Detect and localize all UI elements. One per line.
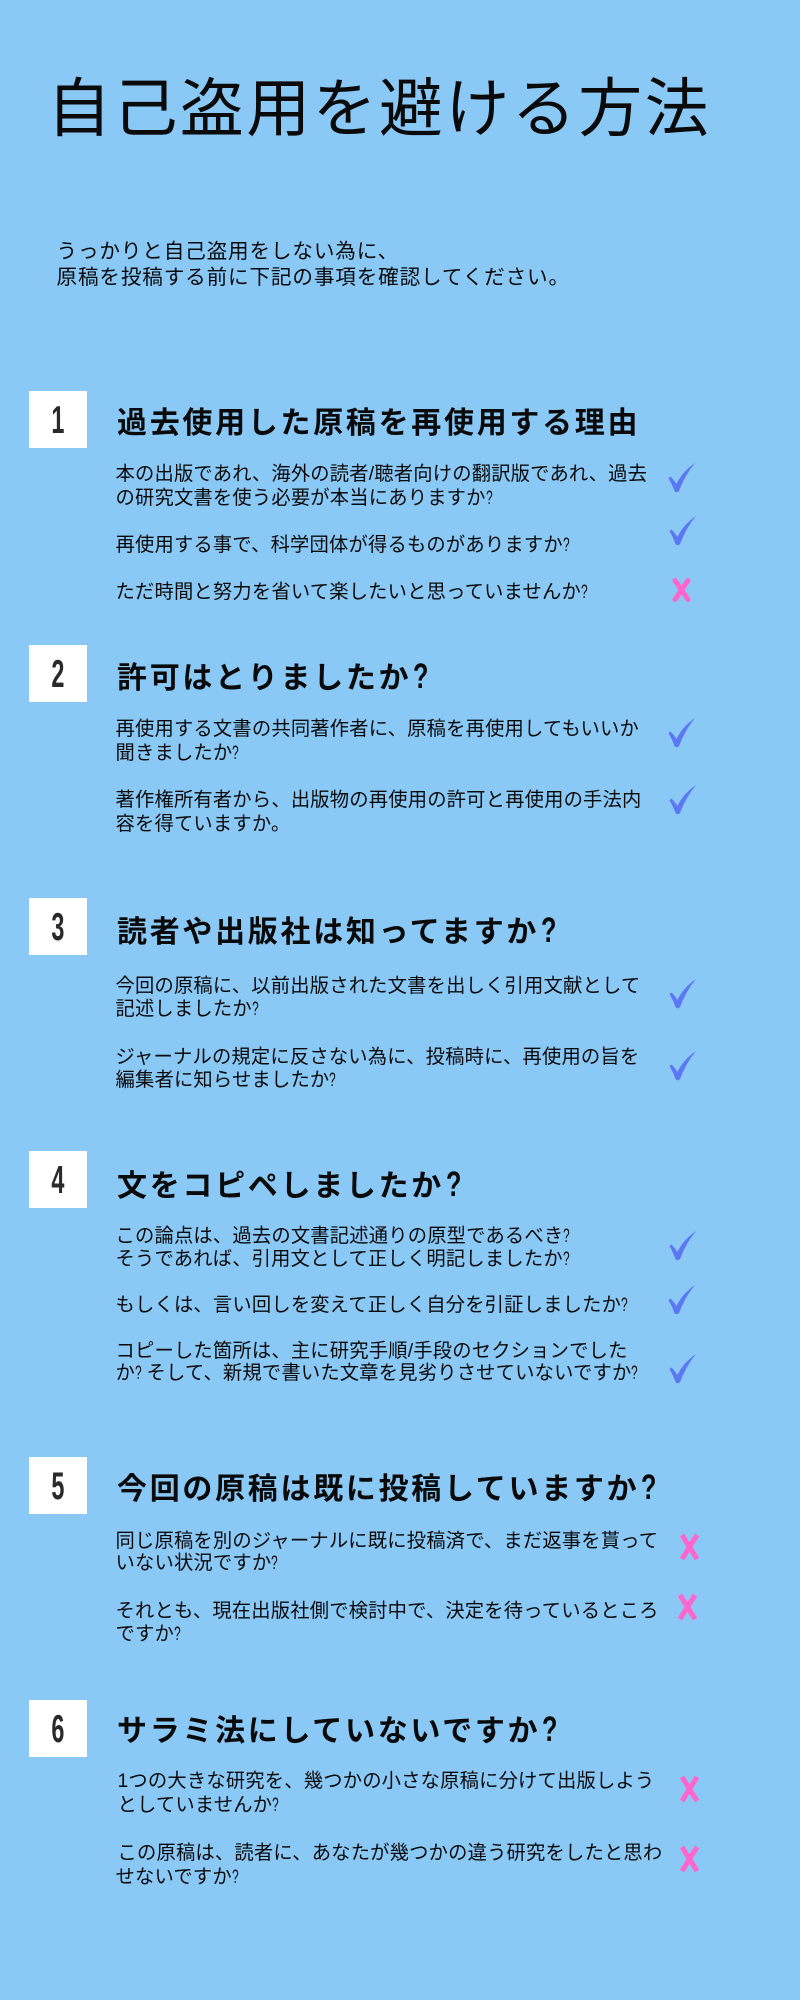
heading 5: 今回の原稿は既に投稿していますか [117, 1473, 639, 1506]
heading 6: ? [542, 1710, 560, 1749]
heading 6: サラミ法にしていないですか [117, 1715, 540, 1748]
question 1-3: ? [581, 582, 588, 603]
heading 1: 過去使用した原稿を再使用する理由 [117, 407, 640, 440]
question 1-1: ? [486, 488, 492, 509]
icon: cross 6-1 [680, 1776, 699, 1802]
question 3-2 [116, 1046, 639, 1090]
icon: check 4-3 [670, 1354, 696, 1384]
question 3-2: ジャーナルの規定に反さない為に、投稿時に、再使用の旨を [116, 1046, 639, 1068]
question 6-2 [116, 1842, 662, 1888]
question 4-2: ? [621, 1294, 628, 1316]
panel: section 3 [29, 898, 696, 1090]
heading 4: 文をコピペしましたか [117, 1170, 444, 1203]
heading 4: ? [446, 1165, 463, 1204]
heading 2: ? [413, 657, 431, 696]
icon: check 1-2 [670, 516, 696, 546]
title: 自己盗用を避ける方法 [47, 73, 711, 145]
icon: cross 5-1 [680, 1534, 699, 1560]
question 6-1 [118, 1770, 654, 1816]
question 6-2: せないですか [116, 1867, 232, 1888]
question 4-1: ? [563, 1248, 570, 1270]
question 5-1: ? [271, 1553, 278, 1574]
question 2-1: 再使用する文書の共同著作者に、原稿を再使用してもいいか [116, 719, 639, 740]
question 1-2: ? [563, 535, 570, 556]
question 3-1: 今回の原稿に、以前出版された文書を出しく引用文献として [116, 976, 640, 996]
panel: section 4 [29, 1151, 696, 1384]
question 2-1 [116, 718, 639, 764]
question 4-3: か そして、新規で書いた文章を見劣りさせていないですか [116, 1363, 631, 1384]
number badge 2 [29, 645, 87, 702]
icon: check 4-1 [670, 1231, 696, 1260]
panel: section 2 [29, 645, 696, 835]
question 1-1 [116, 464, 647, 509]
number badge 1: 1 [51, 399, 65, 442]
icon: cross 6-2 [680, 1846, 699, 1872]
icon: check 1-1 [668, 463, 695, 492]
icon: cross 1-3 [672, 578, 690, 602]
question 4-3: ? [631, 1363, 638, 1384]
question 6-2: ? [232, 1867, 239, 1888]
question 5-1 [116, 1530, 658, 1574]
question 1-1: 本の出版であれ、海外の読者/聴者向けの翻訳版であれ、過去 [116, 464, 647, 485]
question 6-1: ? [272, 1795, 279, 1816]
question 2-2: 著作権所有者から、出版物の再使用の許可と再使用の手法内 [116, 790, 642, 811]
question 5-2: それとも、現在出版社側で検討中で、決定を待っているところ [116, 1600, 659, 1622]
heading 5: ? [641, 1468, 659, 1507]
question 2-1: ? [232, 743, 239, 764]
heading 3: ? [541, 911, 558, 950]
icon: check 2-1 [668, 718, 695, 748]
question 3-1: 記述しましたか [116, 998, 252, 1020]
question 4-1: この論点は、過去の文書記述通りの原型であるべき [116, 1226, 563, 1246]
number badge 5 [29, 1457, 87, 1514]
question 2-1: 聞きましたか [116, 743, 232, 764]
question 1-3: ただ時間と努力を省いて楽したいと思っていませんか [116, 582, 581, 603]
number badge 3: 3 [51, 906, 65, 949]
number badge 6 [29, 1700, 87, 1757]
intro text: 原稿を投稿する前に下記の事項を確認してください。 [56, 266, 570, 289]
question 4-3 [116, 1340, 638, 1384]
number badge 1 [29, 391, 87, 448]
question 2-2: 容を得ていますか。 [116, 814, 290, 835]
intro text: うっかりと自己盗用をしない為に、 [56, 240, 399, 263]
icon: cross 5-2 [678, 1594, 697, 1620]
question 6-1: としていませんか [118, 1795, 272, 1816]
question 3-2: ? [329, 1070, 336, 1090]
icon: check 4-2 [668, 1285, 695, 1314]
question 4-2: もしくは、言い回しを変えて正しく自分を引証しましたか [116, 1294, 621, 1316]
icon: check 3-2 [670, 1051, 696, 1080]
question 5-2: ですか [116, 1624, 174, 1644]
icon: check 3-1 [670, 979, 696, 1008]
panel: section 6 [29, 1700, 699, 1888]
heading 2: 許可はとりましたか [117, 662, 411, 695]
number badge 4: 4 [51, 1159, 65, 1202]
question 4-3: コピーした箇所は、主に研究手順/手段のセクションでした [116, 1340, 628, 1362]
question 4-1: ? [563, 1226, 570, 1246]
number badge 2: 2 [51, 653, 65, 696]
heading 3: 読者や出版社は知ってますか [117, 916, 539, 949]
question 3-2: 編集者に知らせましたか [116, 1070, 329, 1090]
question 4-3: ? [135, 1363, 142, 1384]
question 5-2 [116, 1600, 659, 1644]
question 4-1 [116, 1226, 570, 1270]
icon: check 2-2 [670, 785, 696, 814]
panel: section 1 [29, 391, 696, 603]
question 5-1: 同じ原稿を別のジャーナルに既に投稿済で、まだ返事を貰って [116, 1530, 658, 1552]
number badge 5: 5 [51, 1465, 65, 1508]
question 6-2: この原稿は、読者に、あなたが幾つかの違う研究をしたと思わ [118, 1843, 662, 1864]
question 6-1: 1つの大きな研究を、幾つかの小さな原稿に分けて出版しよう [118, 1771, 654, 1792]
number badge 6: 6 [51, 1708, 65, 1751]
panel: section 5 [29, 1457, 699, 1644]
question 3-1: ? [252, 998, 259, 1020]
question 5-2: ? [174, 1624, 181, 1644]
question 5-1: いない状況ですか [116, 1553, 271, 1574]
number badge 4 [29, 1151, 87, 1208]
question 1-1: の研究文書を使う必要が本当にありますか [116, 488, 486, 509]
number badge 3 [29, 898, 87, 955]
question 2-2 [116, 790, 642, 835]
intro text [56, 240, 570, 289]
question 1-2: 再使用する事で、科学団体が得るものがありますか [116, 535, 563, 556]
question 3-1 [116, 976, 640, 1020]
question 4-1: そうであれば、引用文として正しく明記しましたか [116, 1248, 563, 1270]
